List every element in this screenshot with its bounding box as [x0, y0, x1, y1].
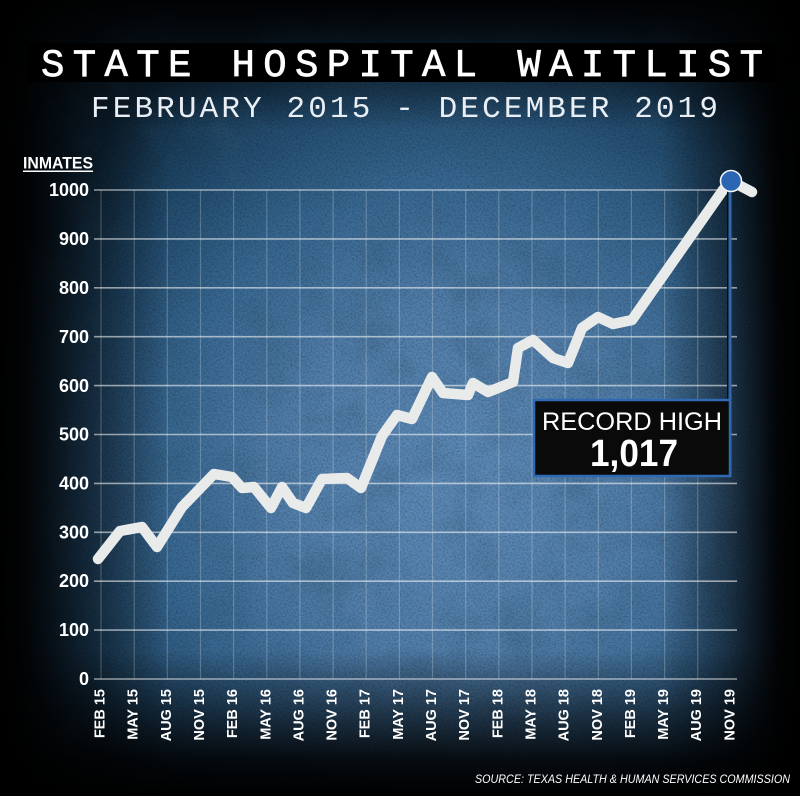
x axis labels: NOV 19 — [722, 689, 738, 741]
y axis labels: 100 — [59, 620, 89, 640]
y axis labels: 1000 — [49, 180, 89, 200]
record high marker — [720, 170, 742, 192]
x axis labels: NOV 17 — [457, 689, 473, 741]
x axis labels — [92, 689, 738, 741]
x axis labels: NOV 16 — [325, 689, 341, 741]
subtitle: FEBRUARY 2015 - DECEMBER 2019 — [91, 92, 718, 127]
y axis labels: 800 — [59, 278, 89, 298]
x axis labels: AUG 19 — [689, 689, 705, 741]
x axis labels: MAY 15 — [126, 689, 142, 740]
y axis labels: 600 — [59, 376, 89, 396]
y axis labels: 200 — [59, 571, 89, 591]
x axis labels: AUG 18 — [557, 689, 573, 741]
x axis labels: MAY 16 — [258, 689, 274, 740]
x axis labels: AUG 16 — [291, 689, 307, 741]
x axis labels: FEB 15 — [92, 689, 108, 738]
y axis labels: 500 — [59, 424, 89, 444]
x axis labels: MAY 19 — [656, 689, 672, 740]
title: STATE HOSPITAL WAITLIST — [41, 44, 763, 88]
x axis labels: FEB 16 — [225, 689, 241, 738]
y axis labels: 300 — [59, 522, 89, 542]
x axis labels: FEB 18 — [490, 689, 506, 738]
callout: record high — [534, 400, 730, 476]
callout: record high: RECORD HIGH — [542, 408, 722, 436]
record high leader line — [727, 181, 732, 477]
x axis labels: AUG 17 — [424, 689, 440, 741]
y axis labels — [49, 180, 89, 689]
x axis labels: MAY 18 — [524, 689, 540, 740]
y axis labels: 900 — [59, 229, 89, 249]
x axis labels: FEB 17 — [358, 689, 374, 738]
x axis labels: AUG 15 — [159, 689, 175, 741]
x axis labels: FEB 19 — [623, 689, 639, 738]
y axis labels: 700 — [59, 327, 89, 347]
y axis labels: 0 — [79, 669, 89, 689]
x axis labels: NOV 18 — [590, 689, 606, 741]
waitlist trend line — [98, 181, 752, 559]
callout: record high: 1,017 — [590, 433, 678, 475]
y axis labels: 400 — [59, 474, 89, 494]
x axis labels: MAY 17 — [391, 689, 407, 740]
x axis labels: NOV 15 — [192, 689, 208, 741]
axis title: inmates: INMATES — [23, 154, 93, 172]
grid lines — [94, 190, 737, 679]
